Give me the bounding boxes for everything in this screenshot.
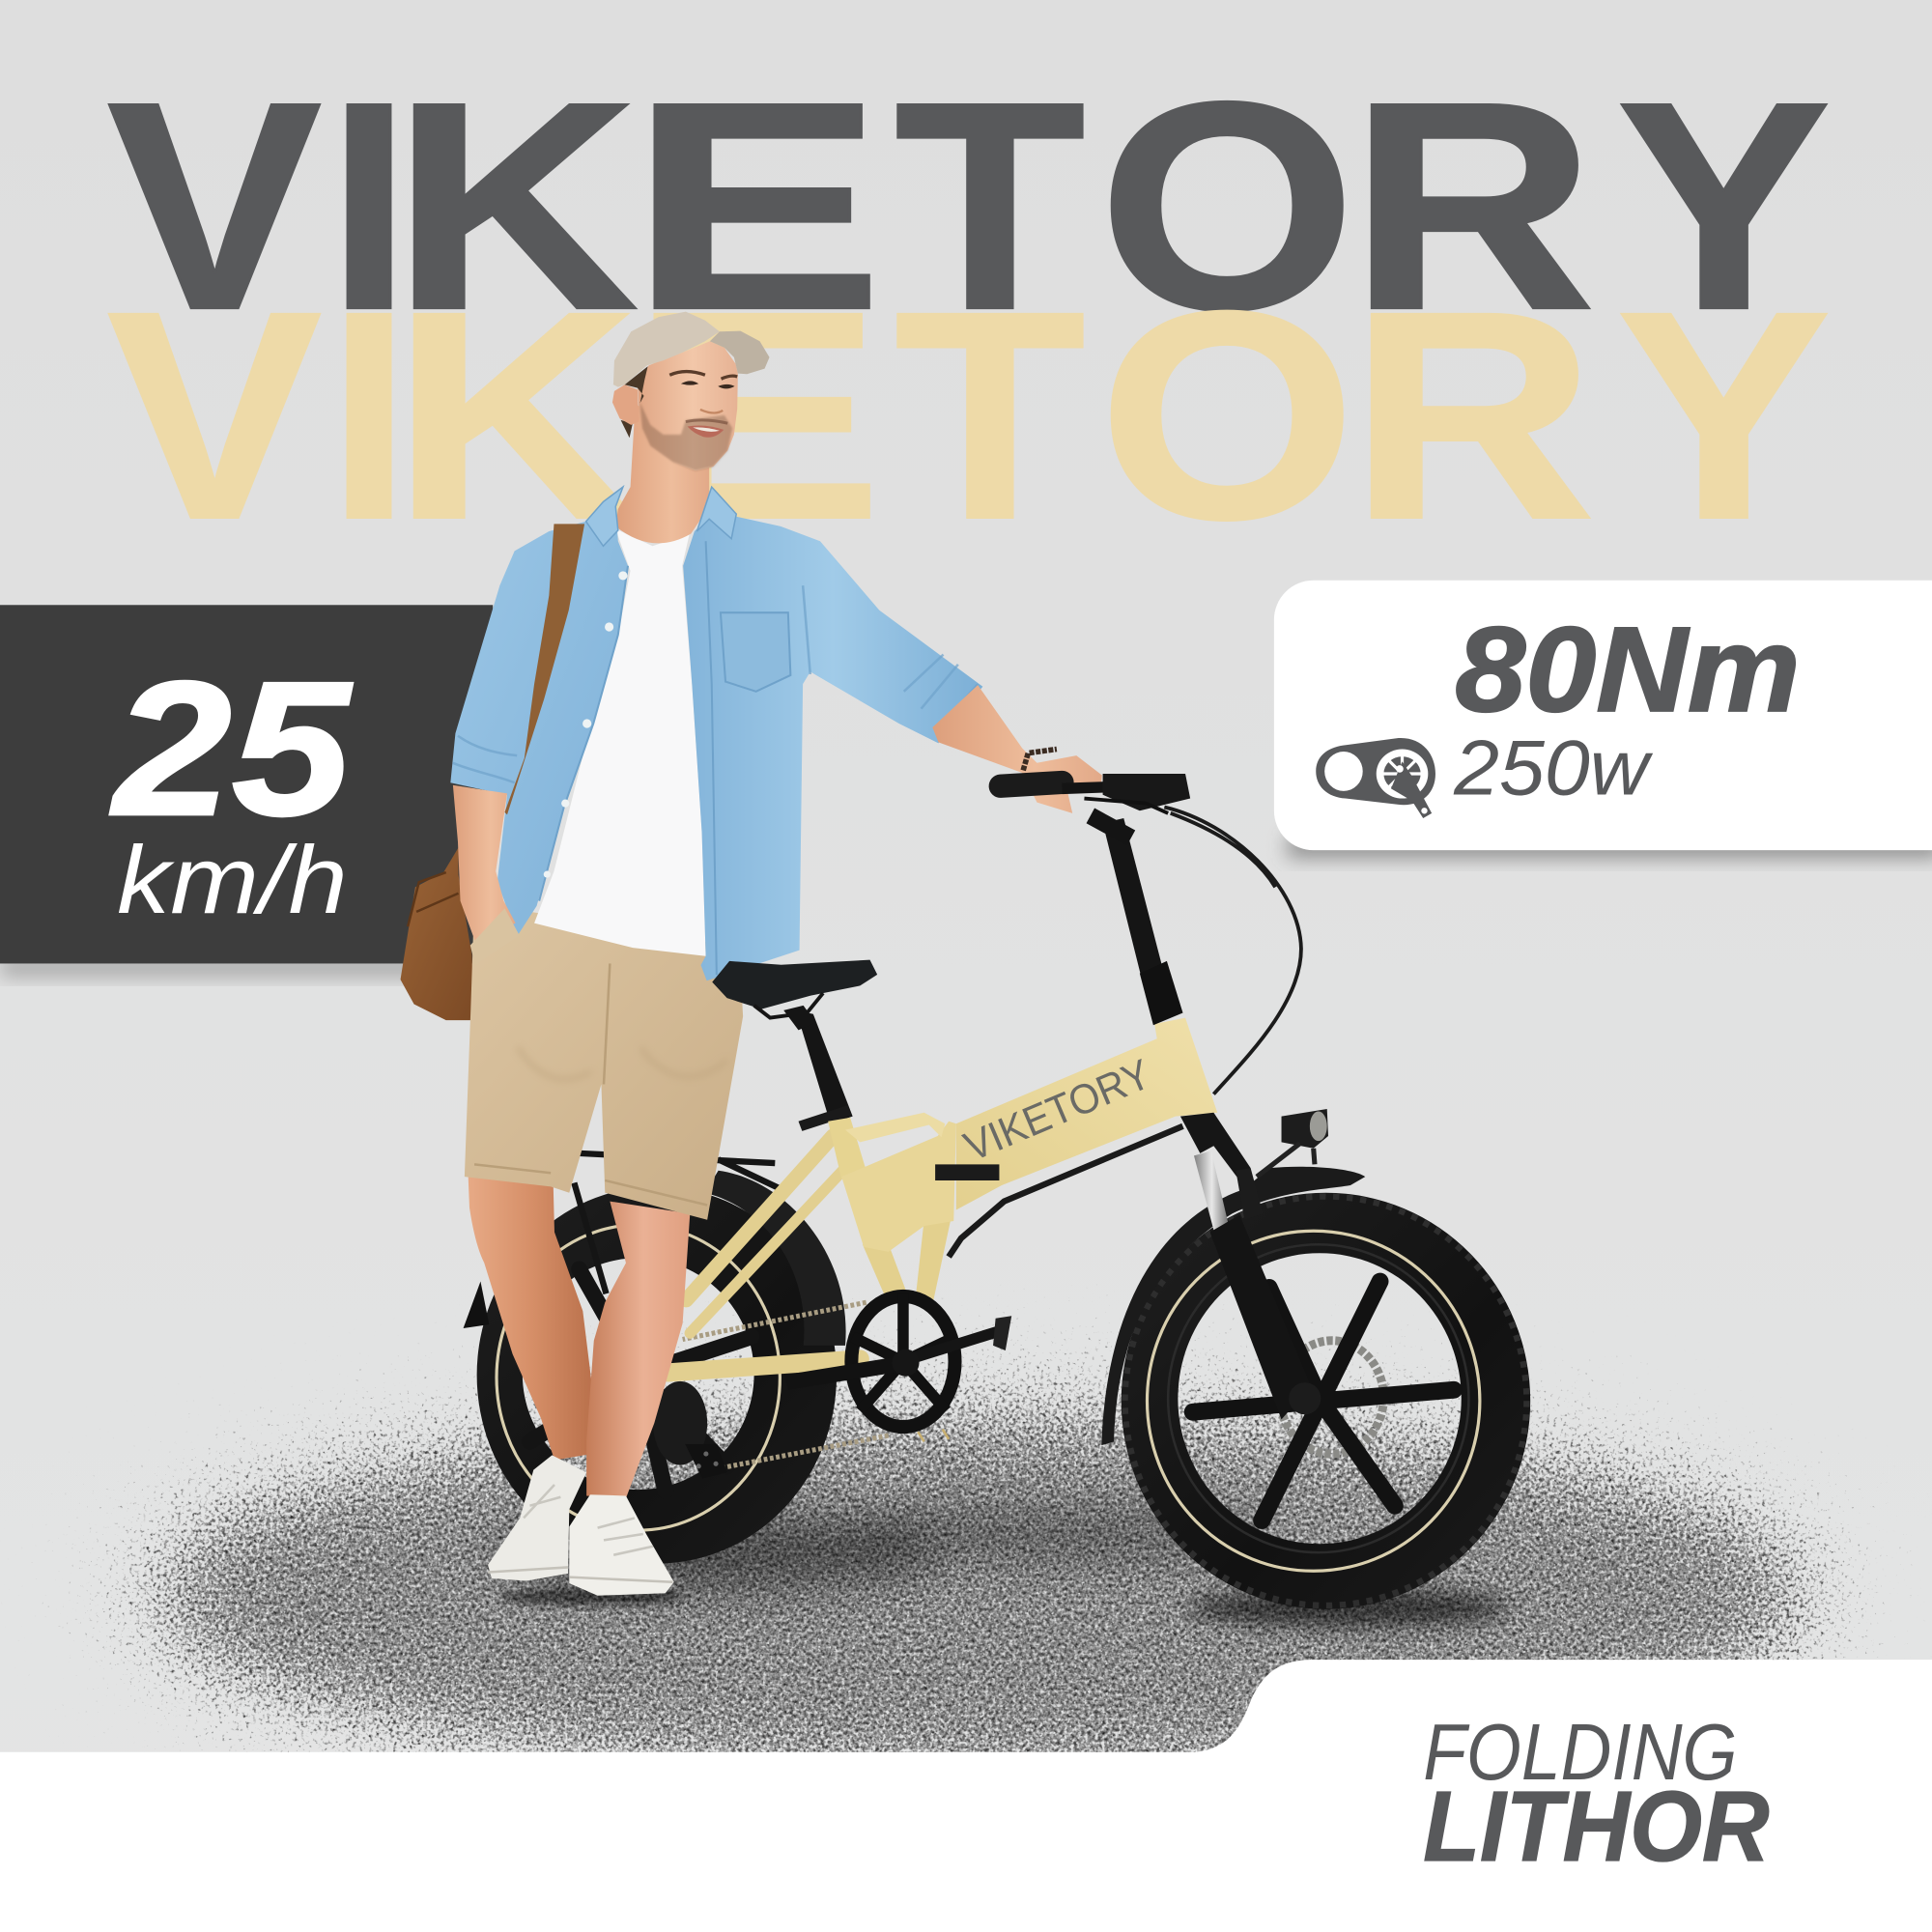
right leg bbox=[586, 1202, 690, 1498]
title: dark VIKETORY: K bbox=[392, 41, 639, 371]
seat and chain stays bbox=[668, 1136, 860, 1373]
cap bbox=[613, 312, 770, 387]
seat clamp bbox=[799, 1105, 851, 1131]
title: dark VIKETORY: R bbox=[1350, 41, 1596, 371]
headlight bbox=[1257, 1109, 1328, 1177]
back hair bbox=[621, 420, 633, 438]
shirt: right panel bbox=[586, 487, 982, 980]
title: cream VIKETORY: Y bbox=[1616, 250, 1831, 581]
cap brim bbox=[710, 331, 770, 374]
pocket edge over hand bbox=[470, 908, 520, 965]
t-shirt bbox=[534, 528, 706, 956]
chain bbox=[683, 1302, 889, 1470]
extended arm and hand bbox=[932, 685, 1102, 813]
left forearm and hand in pocket bbox=[453, 785, 516, 941]
bag strap bbox=[504, 524, 584, 814]
title: dark VIKETORY: O bbox=[1098, 41, 1356, 371]
title: cream VIKETORY: O bbox=[1098, 250, 1356, 581]
nose shade bbox=[700, 410, 723, 412]
title: cream VIKETORY: R bbox=[1350, 250, 1596, 581]
side hair bbox=[625, 366, 648, 403]
shirt: left panel and sleeve bbox=[450, 487, 628, 936]
rear fender and rack bbox=[464, 1153, 846, 1346]
head bbox=[612, 341, 738, 470]
front fender bbox=[1101, 1167, 1365, 1445]
brows bbox=[669, 372, 737, 379]
rear frame section bbox=[828, 1113, 956, 1252]
cap crown bbox=[613, 312, 720, 387]
title: dark VIKETORY: Y bbox=[1616, 41, 1831, 371]
title: dark VIKETORY: I bbox=[327, 41, 411, 371]
title: cream VIKETORY: T bbox=[895, 250, 1086, 581]
title: dark VIKETORY: E bbox=[630, 41, 884, 371]
cassette and derailleur bbox=[653, 1381, 727, 1479]
saddle bbox=[712, 960, 877, 1030]
shorts bbox=[465, 906, 743, 1220]
panel: motor bbox=[1274, 581, 1932, 858]
eyes bbox=[681, 381, 735, 388]
bag bbox=[401, 848, 474, 1020]
upper body, drawn in a scaled coordinate group bbox=[450, 312, 1102, 980]
handlebar bbox=[1001, 774, 1190, 838]
face bbox=[638, 341, 738, 470]
stubble bbox=[640, 403, 732, 470]
neck bbox=[615, 403, 709, 543]
rear wheel bbox=[477, 1186, 837, 1564]
legs and shoes bbox=[469, 1177, 690, 1596]
seat post bbox=[796, 1010, 853, 1123]
power value: 250w bbox=[1453, 725, 1654, 812]
title: cream VIKETORY: V bbox=[107, 250, 324, 581]
speed value: 25 bbox=[109, 641, 354, 855]
panel: speed bbox=[0, 605, 493, 976]
chainring and crank bbox=[783, 1293, 1011, 1441]
title: cream VIKETORY: E bbox=[630, 250, 884, 581]
title: dark VIKETORY: T bbox=[895, 41, 1086, 371]
contact shadows bbox=[493, 1507, 1509, 1628]
front wheel bbox=[1122, 1193, 1530, 1609]
white bottom band bbox=[0, 1660, 1932, 1932]
left shoe bbox=[488, 1455, 586, 1580]
model name: LITHOR bbox=[1423, 1770, 1770, 1882]
title: cream VIKETORY: I bbox=[327, 250, 411, 581]
lower cable guard bbox=[949, 1126, 1182, 1257]
torque value: 80Nm bbox=[1455, 603, 1801, 737]
mouth bbox=[688, 425, 724, 438]
frame logo: VIKETORY bbox=[958, 1051, 1157, 1171]
icon: mid-drive motor bbox=[1316, 738, 1435, 818]
lower frame tubes bbox=[863, 1217, 952, 1303]
title: cream VIKETORY: K bbox=[392, 250, 639, 581]
ear bbox=[612, 384, 639, 425]
main frame tube with logo bbox=[935, 1018, 1217, 1210]
right shoe bbox=[569, 1494, 674, 1596]
man bbox=[401, 312, 1102, 1596]
moustache bbox=[686, 420, 727, 423]
speed unit: km/h bbox=[117, 827, 348, 934]
brake cables bbox=[1164, 807, 1301, 1094]
brake disc bbox=[1280, 1341, 1383, 1454]
ground: asphalt patch bbox=[117, 1392, 1842, 1799]
bracelet bbox=[1023, 750, 1057, 770]
stem and folding post bbox=[1103, 818, 1182, 1025]
left leg bbox=[469, 1177, 594, 1460]
bike: saddle and handlebar bbox=[712, 774, 1190, 1030]
front fork bbox=[1180, 1113, 1321, 1419]
folding label: FOLDING bbox=[1423, 1707, 1737, 1797]
title: dark VIKETORY: V bbox=[107, 41, 324, 371]
bike: rear and main frame bbox=[464, 807, 1530, 1609]
